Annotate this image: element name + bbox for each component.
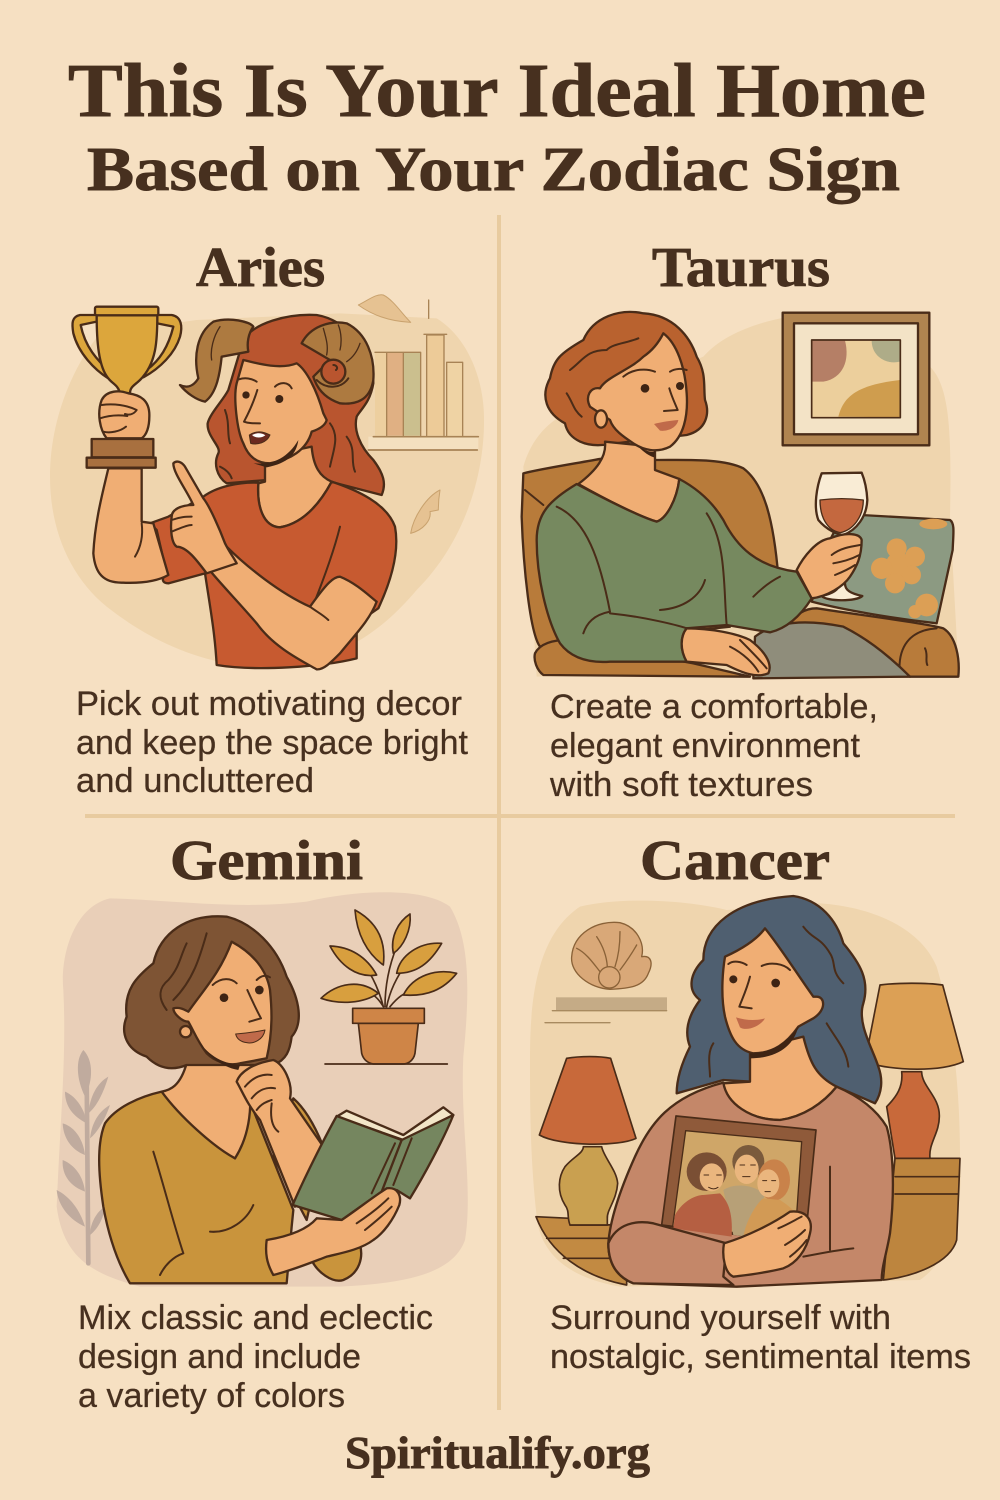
hand holding book	[266, 1188, 400, 1275]
description: Cancer: nostalgic, sentimental items	[550, 1338, 971, 1376]
face	[173, 942, 271, 1070]
family photo	[662, 1116, 816, 1243]
open book	[293, 1107, 453, 1220]
horns	[180, 320, 374, 478]
hand at chin and forearm	[237, 1060, 323, 1207]
description: Gemini	[78, 1299, 433, 1415]
neck and chest	[723, 1037, 837, 1120]
illustration: woman reading a book	[57, 892, 468, 1287]
pointing hand and forearm	[171, 462, 377, 669]
title: Based on Your Zodiac Sign	[87, 136, 900, 204]
potted plant	[321, 910, 457, 1064]
raised arm	[93, 468, 168, 583]
description: Aries: Pick out motivating decor	[76, 685, 462, 723]
left lamp	[536, 1057, 636, 1285]
description: Taurus	[549, 688, 878, 804]
title: This Is Your Ideal Home	[68, 49, 926, 133]
panel: Gemini	[57, 830, 468, 1415]
description: Taurus: with soft textures	[549, 766, 813, 804]
illustration: woman hugging a family photo	[530, 896, 963, 1287]
hair	[677, 896, 881, 1103]
background lavender sprig	[57, 1050, 110, 1263]
description: Taurus: elegant environment	[550, 727, 861, 765]
falling leaves	[358, 295, 440, 533]
neck and chest	[258, 447, 332, 527]
hand holding glass	[797, 534, 862, 598]
face	[722, 928, 823, 1058]
description: Cancer	[550, 1299, 971, 1376]
armchair	[522, 458, 959, 677]
description: Gemini: a variety of colors	[78, 1377, 345, 1415]
seashell on shelf	[545, 922, 667, 1023]
sweater	[608, 1083, 893, 1287]
hair	[208, 315, 384, 495]
heading: Taurus: Taurus	[652, 237, 830, 299]
illustration: woman with ram horns holding a trophy	[50, 295, 484, 669]
wine glass	[816, 473, 867, 600]
right lamp	[865, 983, 963, 1280]
description: Aries: and keep the space bright	[76, 724, 469, 762]
hair	[124, 916, 299, 1068]
face	[588, 333, 687, 457]
description: Aries	[76, 685, 469, 800]
shirt	[150, 482, 396, 668]
description: Taurus: Create a comfortable,	[550, 688, 878, 726]
description: Gemini: design and include	[78, 1338, 361, 1376]
trophy	[72, 307, 181, 468]
face	[235, 360, 327, 467]
chest	[162, 1063, 273, 1158]
cushion	[812, 514, 953, 623]
neck	[578, 442, 679, 522]
arm hugging the photo	[608, 1167, 853, 1285]
hair	[545, 312, 707, 445]
sweater	[99, 1092, 361, 1283]
sweater	[537, 479, 812, 662]
heading: Cancer: Cancer	[640, 830, 830, 892]
description: Aries: and uncluttered	[76, 762, 314, 800]
description: Cancer: Surround yourself with	[550, 1299, 891, 1337]
bookshelf	[368, 300, 478, 450]
heading: Aries: Aries	[196, 237, 325, 299]
resting hand	[682, 628, 770, 675]
description: Gemini: Mix classic and eclectic	[78, 1299, 433, 1337]
trousers	[753, 622, 910, 678]
panel: Aries	[50, 237, 484, 800]
heading: Gemini: Gemini	[170, 830, 363, 892]
footer: website name: Spiritualify.org	[345, 1427, 650, 1478]
title	[68, 49, 926, 204]
panel: Cancer	[530, 830, 971, 1376]
framed art	[783, 313, 929, 445]
panel: Taurus	[522, 237, 959, 804]
illustration: woman in armchair with wine	[522, 312, 959, 678]
